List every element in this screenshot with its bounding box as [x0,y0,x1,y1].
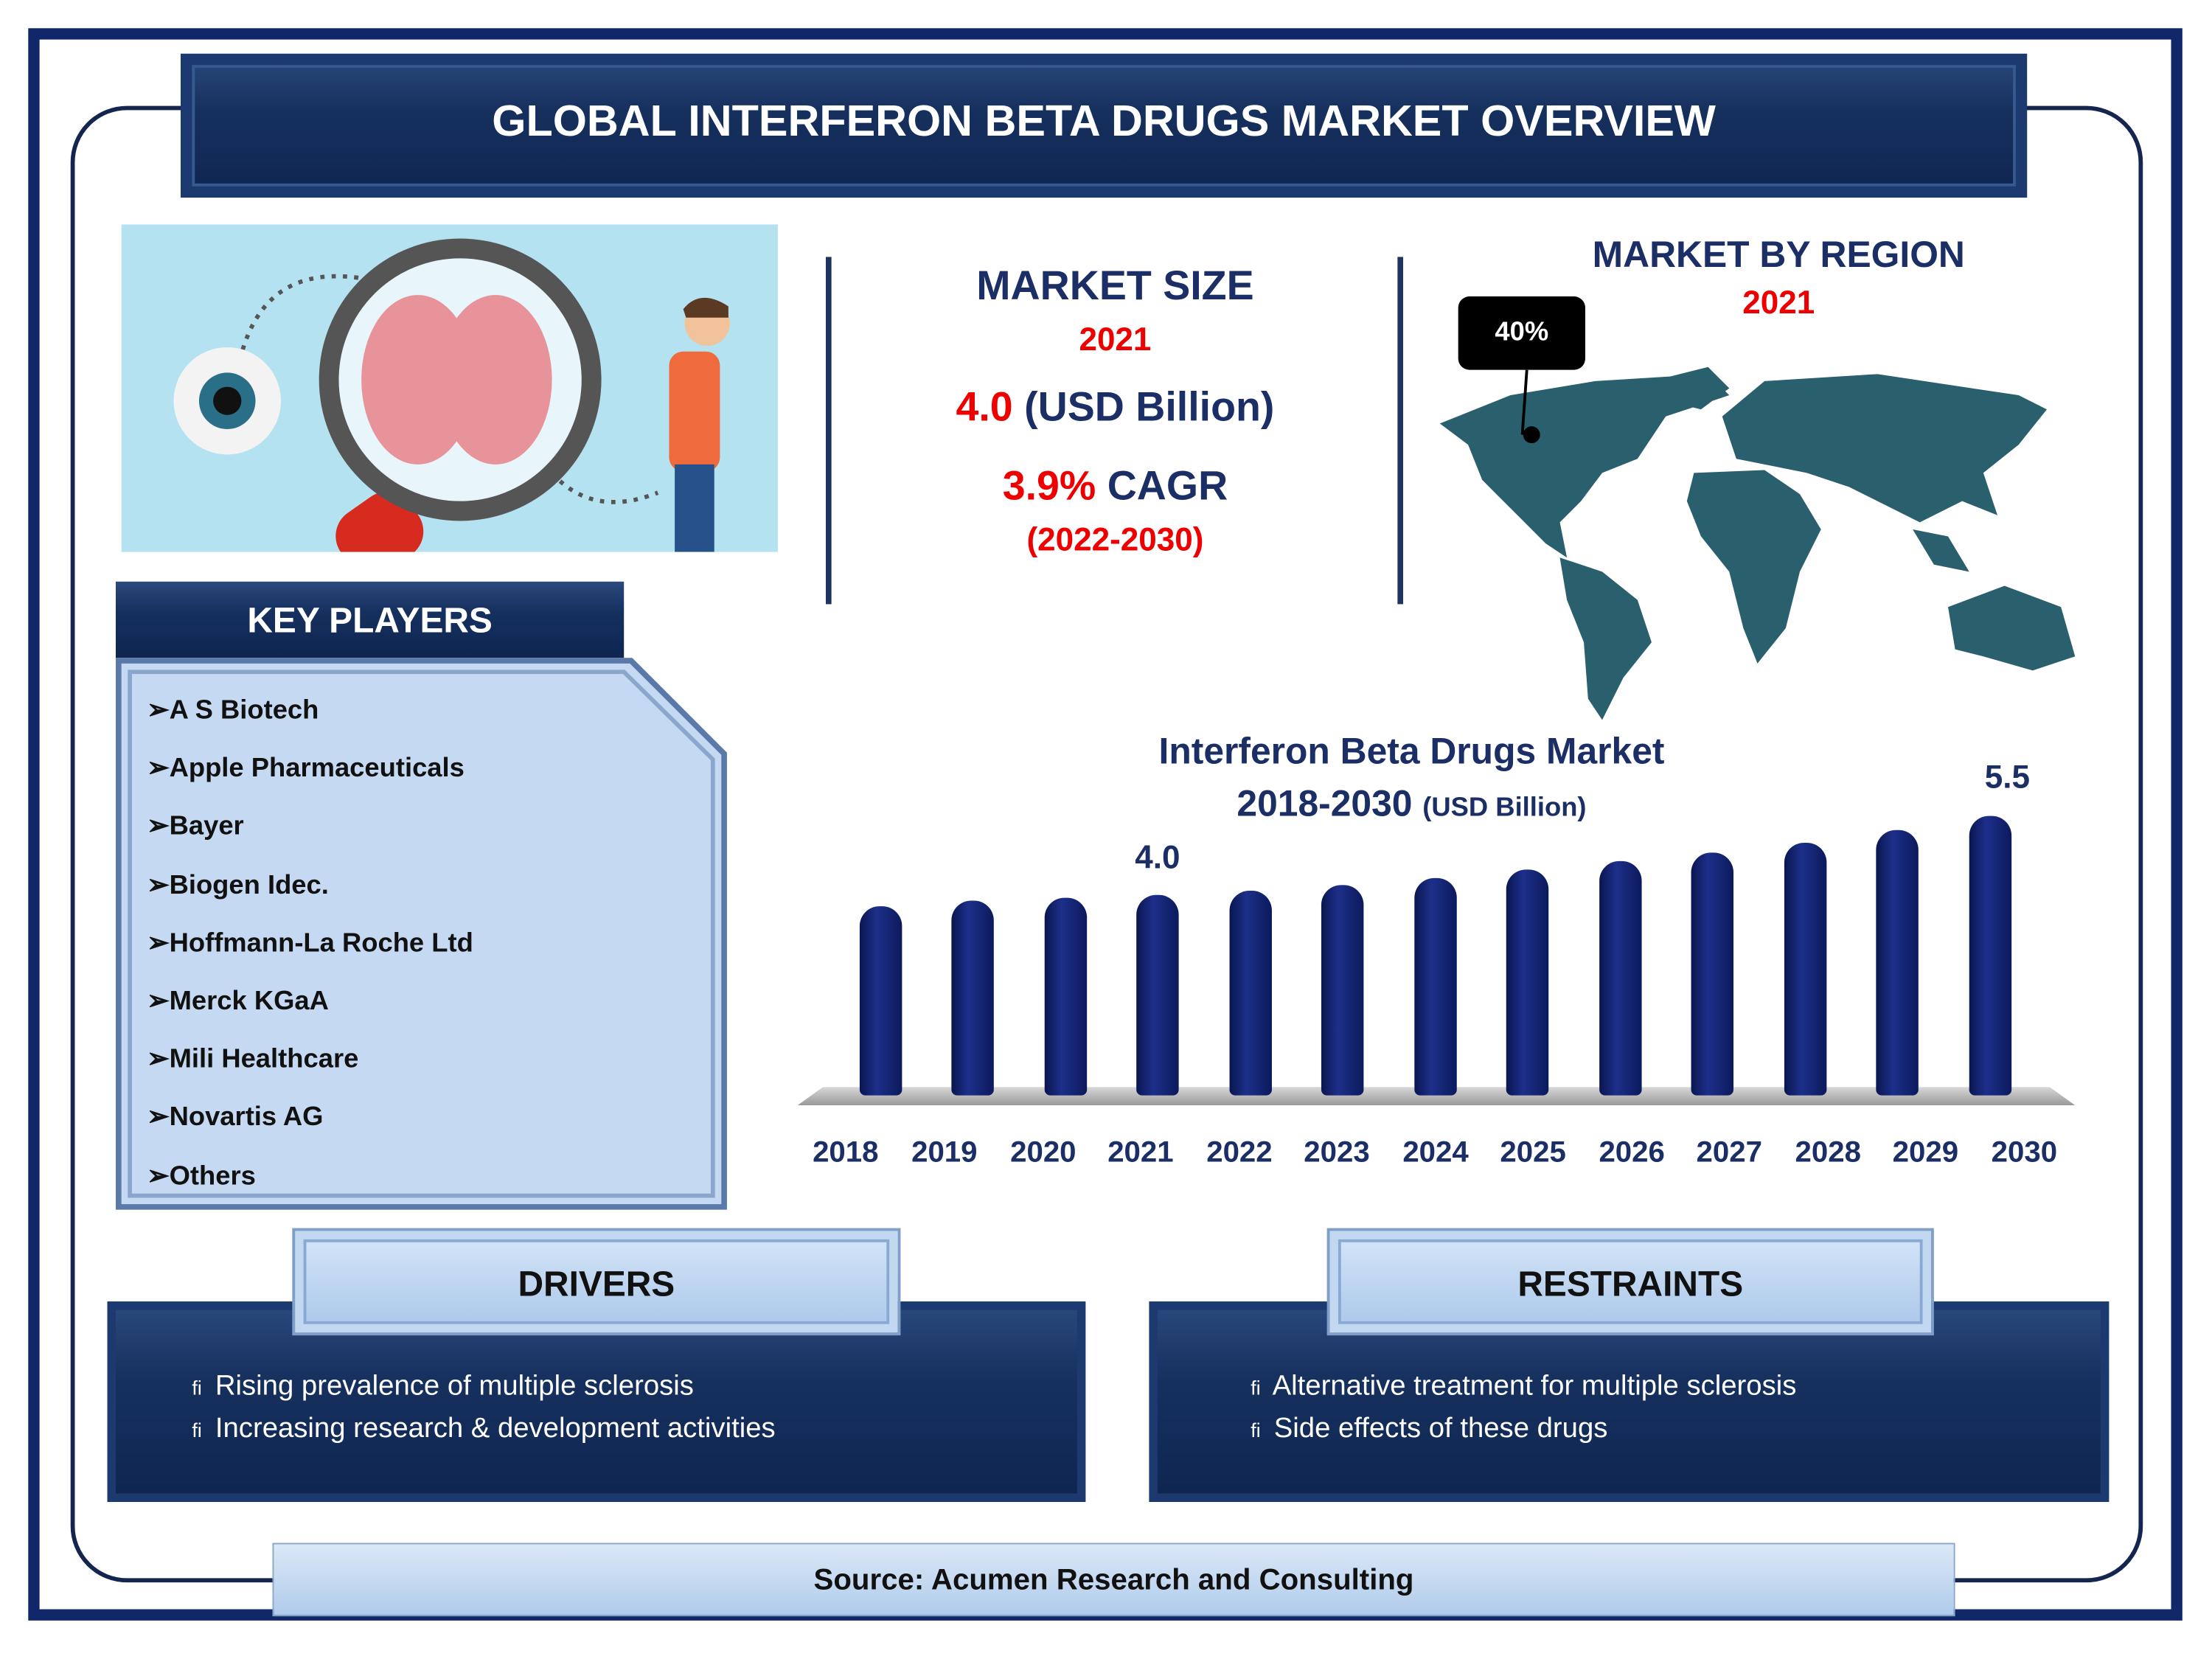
drivers tab [292,1228,900,1335]
panel: drivers [108,1301,1085,1502]
divider lines [826,257,832,604]
title banner: GLOBAL INTERFERON BETA DRUGS MARKET OVERVIEW [492,96,1716,145]
bar chart: 2020 [1010,1136,1077,1169]
source bar: Source: Acumen Research and Consulting [814,1564,1413,1596]
key players list: ➢Novartis AG [147,1103,323,1133]
callout 40% [1458,296,1585,370]
bar chart: 2019 [911,1136,978,1169]
bar chart: 2022 [1206,1136,1273,1169]
chart title [1159,730,1664,824]
key players list: ➢Mili Healthcare [147,1045,358,1074]
market size block: MARKET SIZE [976,264,1254,309]
key players list: ➢Hoffmann-La Roche Ltd [147,928,473,958]
market size block: 3.9% CAGR [1003,465,1228,509]
bar chart: 2025 [1500,1136,1566,1169]
key players list: ➢A S Biotech [147,696,319,726]
market size block [956,264,1274,557]
market size block: 4.0 (USD Billion) [956,386,1274,431]
bar chart: 2023 [1304,1136,1370,1169]
bar chart: 2021 [1107,1136,1174,1169]
key players list: ➢Others [147,1161,256,1191]
key players list: ➢Apple Pharmaceuticals [147,754,465,784]
market by region heading: MARKET BY REGION [1593,233,1965,275]
key players header: KEY PLAYERS [247,602,493,641]
market size block: (2022-2030) [1026,521,1203,557]
key players list: ➢Merck KGaA [147,987,329,1016]
key players list [116,658,727,1210]
bar chart: 2018 [813,1136,879,1169]
bar chart [798,758,2075,1169]
source bar [272,1543,1955,1616]
key players list: ➢Bayer [147,813,244,842]
panel: drivers: ﬁ Rising prevalence of multiple sclerosis [192,1371,694,1402]
world map [1439,367,2075,720]
bar chart: 2026 [1599,1136,1665,1169]
restraints tab: RESTRAINTS [1517,1265,1743,1304]
panel: restraints: ﬁ Alternative treatment for multiple sclerosis [1251,1371,1796,1402]
bar chart: 2027 [1697,1136,1762,1169]
bar chart: 2024 [1402,1136,1469,1169]
illustration: brain under magnifier [122,224,778,552]
bar chart: 4.0 [1135,838,1180,875]
market size block: 2021 [1079,321,1151,357]
drivers tab: DRIVERS [518,1265,675,1304]
key players header [116,582,624,658]
panel: restraints: ﬁ Side effects of these drugs [1251,1413,1607,1444]
key players list: ➢Biogen Idec. [147,870,329,900]
market by region heading [1593,233,1965,321]
chart title: 2018-2030 (USD Billion) [1237,782,1587,824]
bar chart: 2028 [1795,1136,1861,1169]
bar chart: 5.5 [1985,758,2030,795]
panel: restraints [1149,1301,2109,1502]
restraints tab [1327,1228,1934,1335]
title banner [181,54,2027,198]
chart title: Interferon Beta Drugs Market [1159,730,1664,772]
market by region heading: 2021 [1742,284,1815,321]
panel: drivers: ﬁ Increasing research & development activities [192,1413,776,1444]
bar chart: 2029 [1893,1136,1958,1169]
callout 40%: 40% [1495,318,1548,347]
bar chart: 2030 [1992,1136,2057,1169]
